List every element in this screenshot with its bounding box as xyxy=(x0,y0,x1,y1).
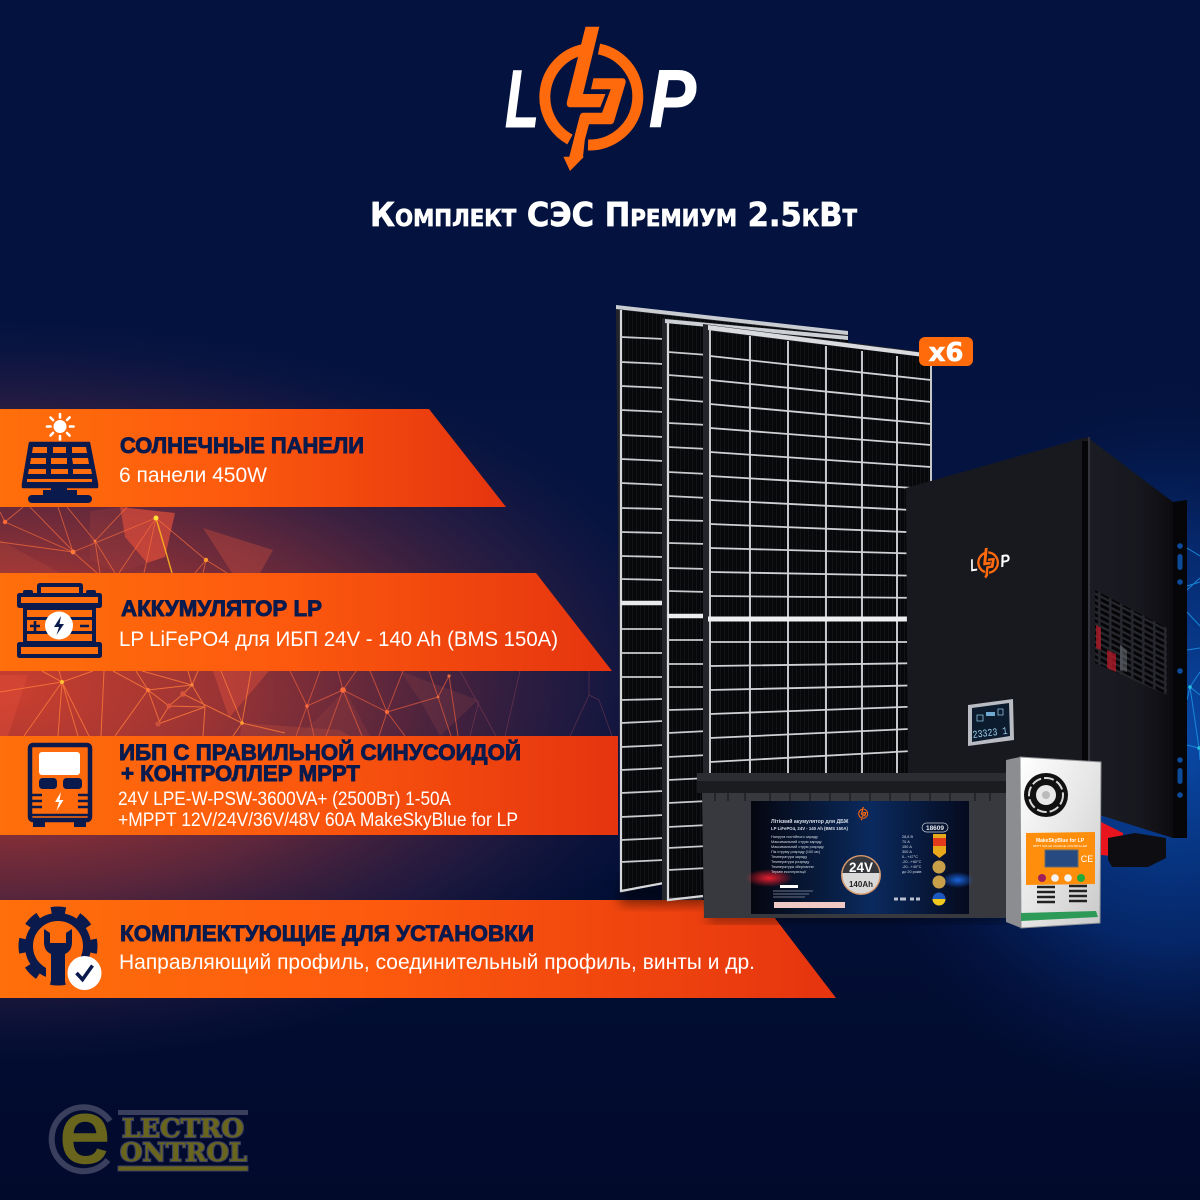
label spec list: 70 А xyxy=(902,840,910,844)
controller side xyxy=(1006,757,1021,928)
MPPT controller xyxy=(1006,757,1101,928)
inverter xyxy=(906,437,1187,867)
inverter logo: P xyxy=(999,550,1012,571)
electrocontrol logo: ONTROL xyxy=(120,1138,247,1167)
label spec list: 0...+47°C xyxy=(902,855,918,859)
inverter mounting rail xyxy=(1173,500,1187,838)
inverter side vents xyxy=(1095,590,1167,695)
description: Направляющий профиль, соединительный профиль, винты и др. xyxy=(119,950,755,974)
title: Комплект СЭС Премиум 2.5кВт xyxy=(370,195,857,234)
solar panels xyxy=(616,305,932,900)
logo letter L: L xyxy=(505,54,539,145)
icon: inverter xyxy=(30,745,90,827)
label spec list xyxy=(771,835,922,874)
icon: battery xyxy=(17,583,102,658)
battery label: 18609 xyxy=(926,825,944,832)
label spec list: Пік струму розряду (100 мс) xyxy=(771,850,821,854)
background network: upper red mesh xyxy=(0,507,273,573)
label seals xyxy=(933,834,946,858)
label spec list: до 20 років xyxy=(902,870,921,874)
heading line 2: + КОНТРОЛЛЕР МРРТ xyxy=(121,761,360,786)
heading line 1: ИБП С ПРАВИЛЬНОЙ СИНУСОИДОЙ xyxy=(119,740,521,765)
inverter logo xyxy=(968,545,1012,581)
label title: Літієвий акумулятор для ДБЖ xyxy=(771,818,849,825)
label spec list: Термін експлуатації xyxy=(771,870,807,874)
logo xyxy=(505,27,696,171)
middle panel xyxy=(662,318,848,900)
controller orange panel: MPPT SOLAR CHARGE CONTROLLER xyxy=(1033,844,1088,848)
label spec list: 300 А xyxy=(902,850,912,854)
description line 2: +MPPT 12V/24V/36V/48V 60A MakeSkyBlue for LP xyxy=(118,809,518,831)
label voltage circle xyxy=(841,855,881,895)
band: accessories xyxy=(0,900,836,998)
label spec list: Температура розряду xyxy=(771,860,809,864)
battery body xyxy=(702,793,1008,918)
logo bolt and ring xyxy=(545,27,638,171)
controller orange panel: CE xyxy=(1081,854,1093,864)
icon: gear with wrench and check xyxy=(23,911,102,990)
battery ribs xyxy=(715,793,990,801)
battery label xyxy=(745,801,974,914)
icon: sun and solar panel xyxy=(23,414,97,503)
inverter display xyxy=(968,699,1014,746)
label spec list: -20...+60°C xyxy=(902,860,922,864)
badge: x6 xyxy=(919,337,973,368)
heading: КОМПЛЕКТУЮЩИЕ ДЛЯ УСТАНОВКИ xyxy=(120,921,534,946)
battery label: 24V xyxy=(849,860,873,875)
label spec list: Температура заряду xyxy=(771,855,807,859)
description: LP LiFePO4 для ИБП 24V - 140 Ah (BMS 150A) xyxy=(119,627,558,651)
controller front xyxy=(1020,757,1101,928)
heading: СОЛНЕЧНЫЕ ПАНЕЛИ xyxy=(120,433,364,458)
label spec list: Температура зберігання xyxy=(771,865,814,869)
controller vents xyxy=(1037,886,1087,902)
label spec list: 28,8 В xyxy=(902,835,913,839)
battery label: 140Ah xyxy=(849,880,873,889)
inverter front face xyxy=(906,437,1090,815)
background network: lower red mesh xyxy=(0,671,612,736)
controller fan xyxy=(1024,773,1068,817)
inverter connectors xyxy=(1101,822,1166,867)
label pill xyxy=(922,823,948,832)
electrocontrol logo: LECTRO xyxy=(122,1114,244,1143)
front panel xyxy=(703,324,932,780)
battery xyxy=(697,773,1008,918)
controller terminal xyxy=(1021,911,1098,921)
label spec list: Напруга постійного заряду xyxy=(771,835,818,839)
logo letter P: P xyxy=(649,54,696,145)
inverter logo: L xyxy=(969,555,979,575)
heading: АККУМУЛЯТОР LP xyxy=(121,596,322,621)
shadow beneath battery xyxy=(708,912,1008,922)
shadow below panels xyxy=(620,880,710,904)
electrocontrol logo: e xyxy=(60,1082,110,1181)
description: 6 панели 450W xyxy=(119,463,268,487)
inverter side face xyxy=(1087,437,1173,838)
description line 1: 24V LPE-W-PSW-3600VA+ (2500Вт) 1-50А xyxy=(118,788,451,810)
badge: x6: x6 xyxy=(929,338,963,368)
battery lid xyxy=(697,773,1006,793)
back panel xyxy=(616,305,848,893)
electrocontrol logo xyxy=(52,1082,248,1181)
controller orange panel xyxy=(1026,832,1095,885)
label spec list: Максимальний струм розряду xyxy=(771,845,824,849)
band: inverter xyxy=(0,736,618,835)
controller orange panel: MakeSkyBlue for LP xyxy=(1036,838,1085,844)
label spec list: -20...+40°C xyxy=(902,865,922,869)
band: solar panels xyxy=(0,409,506,507)
label logo xyxy=(859,807,868,821)
label spec list: Максимальний струм заряду xyxy=(771,840,822,844)
band: battery xyxy=(0,573,612,671)
inverter display: 23323 1 xyxy=(972,726,1008,742)
label spec list: 150 А xyxy=(902,845,912,849)
battery label: LP LiFePO4, 24V - 140 Ah (BMS 150A) xyxy=(771,826,848,831)
background network: right blue mesh xyxy=(1187,548,1200,760)
